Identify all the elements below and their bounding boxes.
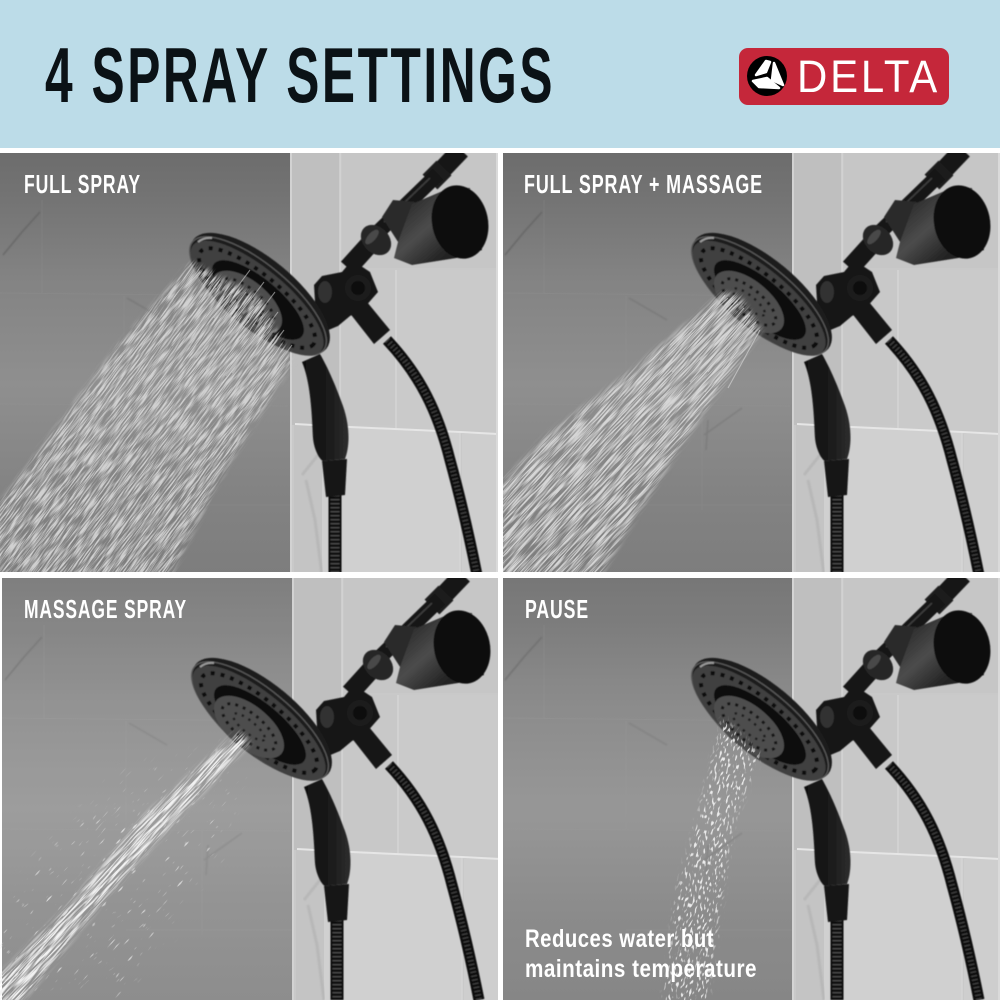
water: full spray plus massage — [503, 285, 768, 572]
shower fixture — [171, 150, 495, 575]
shower fixture — [173, 575, 497, 1000]
pause note: Reduces water but — [525, 925, 714, 953]
Delta logo — [739, 48, 949, 105]
wall lightening — [503, 578, 794, 1000]
label: MASSAGE SPRAY — [24, 594, 187, 624]
panel: massage spray — [0, 575, 502, 1000]
water: pause trickle — [661, 718, 761, 1000]
water: full spray — [0, 250, 300, 572]
wall — [502, 150, 1000, 575]
water: massage jet — [0, 725, 255, 1000]
title: 4 SPRAY SETTINGS — [45, 31, 555, 119]
pause note — [525, 925, 757, 983]
shower fixture — [673, 150, 997, 575]
label: FULL SPRAY — [24, 169, 141, 199]
panel: full spray — [0, 150, 500, 575]
logo wordmark: DELTA — [797, 51, 940, 102]
panel: full spray + massage — [502, 150, 1000, 575]
pause note: maintains temperature — [525, 955, 757, 983]
wall lightening — [0, 578, 292, 1000]
shower fixture — [673, 575, 997, 1000]
wall — [502, 575, 1000, 1000]
water droplets: massage scatter — [0, 748, 236, 998]
water: thin jets near head — [160, 270, 292, 398]
wall — [0, 150, 500, 575]
logo mark — [747, 56, 787, 96]
header band — [0, 0, 1000, 148]
wall — [2, 575, 502, 1000]
label: PAUSE — [525, 594, 589, 624]
water: thin jets near head — [660, 295, 760, 392]
panel: pause — [502, 575, 1000, 1000]
label: FULL SPRAY + MASSAGE — [524, 169, 763, 199]
